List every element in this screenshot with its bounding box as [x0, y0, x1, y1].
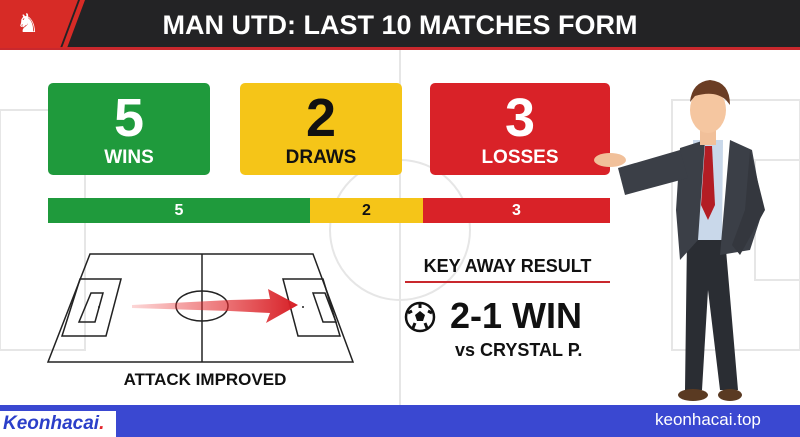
key away result heading — [405, 256, 610, 283]
card: draws — [240, 83, 402, 175]
icon: devil crest: ♞ — [16, 8, 39, 38]
card: losses: LOSSES — [481, 147, 559, 168]
header — [0, 0, 800, 50]
illustration: presenter — [594, 80, 765, 401]
card: wins: WINS — [104, 147, 154, 168]
card: losses — [430, 83, 610, 175]
icon: football — [404, 302, 436, 332]
form bar: 5 — [175, 202, 183, 219]
card: draws: 2 — [306, 88, 336, 148]
key away result heading: KEY AWAY RESULT — [424, 256, 591, 276]
footer url: keonhacai.top — [655, 410, 761, 429]
pitch diagram with arrow — [46, 253, 354, 363]
form bar — [48, 198, 610, 223]
header red logo block — [0, 0, 85, 48]
card: losses: 3 — [505, 88, 535, 148]
neck & head — [700, 125, 716, 145]
footer logo: Keonhacai. — [3, 413, 104, 434]
jacket — [676, 140, 763, 260]
score text: 2-1 WIN — [450, 295, 582, 336]
right arm — [732, 150, 765, 255]
card: draws: DRAWS — [286, 147, 356, 168]
footer bar — [0, 405, 800, 437]
opponent text: vs CRYSTAL P. — [455, 340, 582, 360]
tie — [701, 146, 715, 220]
arm — [618, 150, 688, 195]
card: wins: 5 — [114, 88, 144, 148]
form bar: 3 — [512, 202, 521, 219]
form bar: 2 — [362, 202, 371, 219]
shirt — [693, 140, 723, 240]
card: wins — [48, 83, 210, 175]
label: attack improved: ATTACK IMPROVED — [124, 370, 286, 389]
legs — [685, 238, 738, 390]
title: MAN UTD: LAST 10 MATCHES FORM — [162, 10, 637, 40]
